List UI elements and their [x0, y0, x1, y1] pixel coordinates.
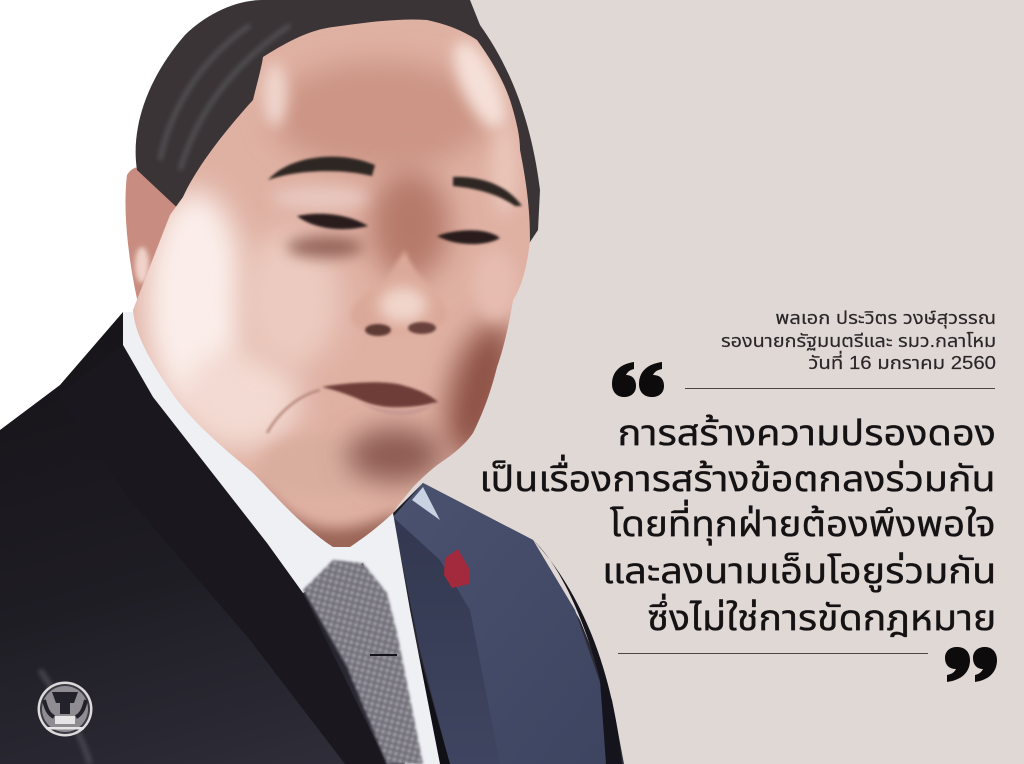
black lapel shadow [388, 525, 450, 764]
date: วันที่ 16 มกราคม 2560 [808, 353, 996, 373]
dark sleeve fold [533, 540, 622, 764]
white photo background [0, 0, 270, 450]
lapel pin [444, 549, 470, 588]
lapel [393, 517, 500, 764]
portrait photo [0, 0, 624, 764]
ear [125, 167, 178, 325]
hair [136, 0, 540, 245]
shirt collar [123, 312, 440, 764]
nose [351, 250, 448, 336]
quote line 4: และลงนามเอ็มโอยูร่วมกัน [602, 550, 996, 591]
top rule [685, 388, 995, 389]
mouth [267, 382, 438, 433]
emblem [38, 682, 92, 736]
suit body [0, 312, 624, 764]
tie bar [370, 654, 397, 656]
name and position block [721, 308, 996, 373]
left lapel seam [58, 345, 387, 764]
eyes [297, 214, 368, 229]
position: รองนายกรัฐมนตรีและ รมว.กลาโหม [721, 331, 996, 351]
face [133, 20, 530, 547]
name: พลเอก ประวิตร วงษ์สุวรรณ [775, 308, 996, 328]
quote line 5: ซึ่งไม่ใช่การขัดกฎหมาย [647, 597, 996, 638]
necktie [303, 560, 423, 764]
bottom rule [618, 653, 928, 654]
opening quote mark [612, 362, 664, 397]
right suit panel [393, 483, 618, 764]
closing quote mark [945, 647, 997, 682]
quote line 3: โดยที่ทุกฝ่ายต้องพึงพอใจ [610, 503, 996, 544]
eyebrows [268, 157, 375, 180]
quote line 1: การสร้างความปรองดอง [618, 412, 996, 453]
quote line 2: เป็นเรื่องการสร้างข้อตกลงร่วมกัน [480, 458, 996, 499]
quote text [480, 412, 996, 638]
